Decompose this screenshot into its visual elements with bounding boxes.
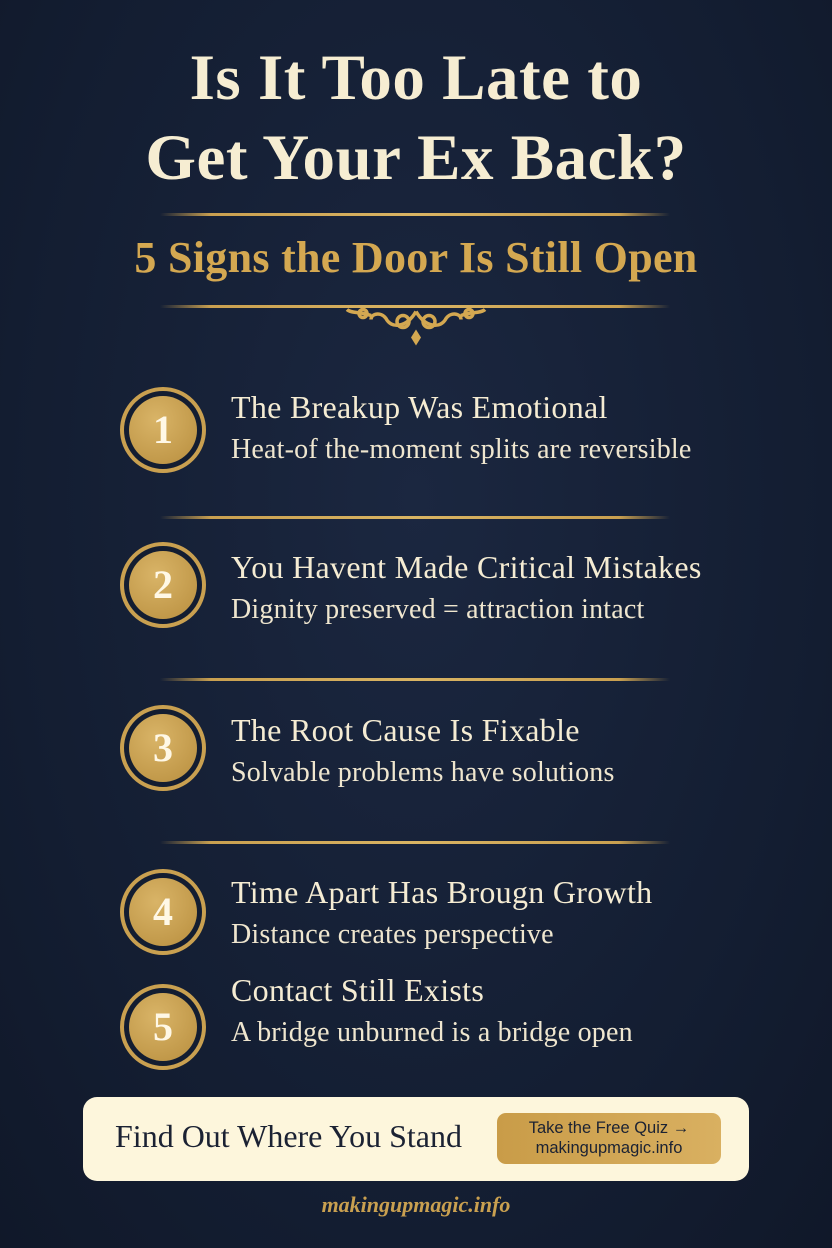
CTA panel (83, 1097, 749, 1181)
number 5 (120, 984, 206, 1070)
CTA button: Take the Free Quiz → (529, 1119, 689, 1137)
item 2 (120, 542, 702, 628)
number 4: 4 (153, 889, 173, 934)
bottom divider (160, 305, 670, 308)
text 2 (231, 549, 702, 625)
item 4 (120, 869, 652, 955)
title: Get Your Ex Back? (145, 122, 687, 194)
CTA button (497, 1113, 721, 1164)
text 3: The Root Cause Is Fixable (231, 712, 580, 748)
text 3 (231, 712, 615, 788)
number 3: 3 (153, 725, 173, 770)
text 4: Distance creates perspective (231, 919, 554, 950)
ornament (346, 308, 486, 346)
text 1: Heat-of the-moment splits are reversible (231, 434, 692, 465)
text 1 (231, 389, 692, 465)
title (145, 42, 687, 194)
text 3: Solvable problems have solutions (231, 757, 615, 788)
text 2: You Havent Made Critical Mistakes (231, 549, 702, 585)
number 5: 5 (153, 1004, 173, 1049)
number 1 (120, 387, 206, 473)
number 2: 2 (153, 562, 173, 607)
title: Is It Too Late to (190, 42, 642, 114)
text 4: Time Apart Has Brougn Growth (231, 874, 652, 910)
item 1 (120, 387, 692, 473)
item 3 (120, 705, 615, 791)
CTA text: Find Out Where You Stand (115, 1118, 462, 1154)
text 4 (231, 874, 652, 950)
text 5: Contact Still Exists (231, 972, 484, 1008)
CTA button: makingupmagic.info (536, 1139, 682, 1157)
item 5 (120, 972, 633, 1070)
text 5 (231, 972, 633, 1048)
top divider (160, 213, 670, 216)
text 2: Dignity preserved = attraction intact (231, 594, 644, 625)
text 1: The Breakup Was Emotional (231, 389, 608, 425)
number 1: 1 (153, 407, 173, 452)
text 5: A bridge unburned is a bridge open (231, 1017, 633, 1048)
footer: makingupmagic.info (322, 1192, 510, 1217)
number 2 (120, 542, 206, 628)
number 3 (120, 705, 206, 791)
number 4 (120, 869, 206, 955)
subtitle: 5 Signs the Door Is Still Open (134, 233, 698, 282)
